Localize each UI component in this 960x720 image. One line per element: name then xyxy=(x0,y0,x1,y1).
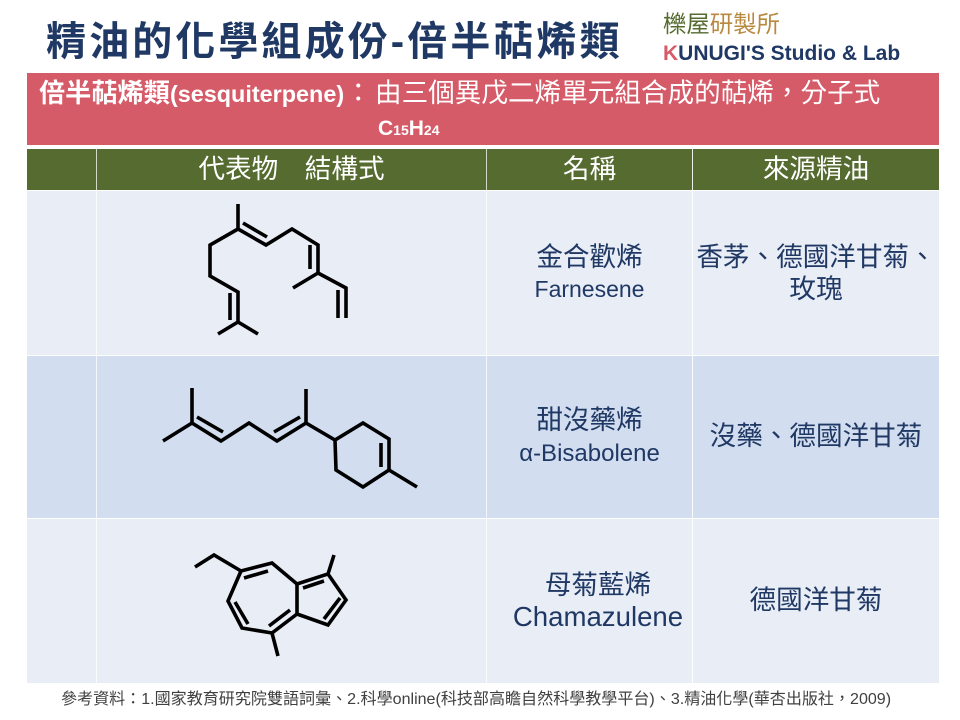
panel: definition banner xyxy=(27,73,939,145)
title: 精油的化學組成份-倍半萜烯類 xyxy=(46,20,623,64)
English name: Chamazulene xyxy=(513,601,683,632)
table header row xyxy=(27,149,939,190)
source: Chamazulene: 德國洋甘菊 xyxy=(750,585,882,615)
name: Chamazulene xyxy=(513,570,683,632)
row 2 background xyxy=(27,356,939,518)
name: Farnesene xyxy=(535,242,644,302)
header: source oil: 來源精油 xyxy=(763,154,869,184)
definition text: 由三個異戊二烯單元組合成的萜烯，分子式 xyxy=(375,78,880,108)
header: structure: 代表物 結構式 xyxy=(198,154,385,184)
references footnote: 參考資料：1.國家教育研究院雙語詞彙、2.科學online(科技部高瞻自然科學教學平台)、3.精油化學(華杏出版社，2009) xyxy=(61,690,891,708)
Chinese name: 母菊藍烯 xyxy=(545,570,651,600)
name: alpha-Bisabolene xyxy=(519,405,660,467)
source line 2: 玫瑰 xyxy=(789,274,843,304)
header: name: 名稱 xyxy=(563,154,616,184)
English name: Farnesene xyxy=(535,276,644,302)
panel: table xyxy=(27,149,939,683)
source: alpha-Bisabolene: 沒藥、德國洋甘菊 xyxy=(710,421,922,451)
source line 1: 香茅、德國洋甘菊、 xyxy=(696,242,936,272)
Chinese name: 金合歡烯 xyxy=(536,242,643,272)
column divider 3 xyxy=(692,149,693,683)
logo english name: KUNUGI'S Studio & Lab xyxy=(663,42,900,65)
definition colon: ： xyxy=(345,78,372,108)
Chinese name: 甜沒藥烯 xyxy=(536,405,643,435)
column divider 1 xyxy=(96,149,97,683)
molecule: Farnesene xyxy=(210,204,346,334)
molecule: alpha-Bisabolene xyxy=(163,388,417,487)
logo chinese name: 櫟屋研製所 xyxy=(663,11,780,37)
column divider 2 xyxy=(486,149,487,683)
molecule: Chamazulene xyxy=(195,555,346,656)
source: Farnesene xyxy=(696,242,936,304)
logo xyxy=(663,11,900,65)
English name: α-Bisabolene xyxy=(519,440,660,467)
molecular formula: C15H24 xyxy=(378,117,440,140)
row 3 background xyxy=(27,519,939,683)
row 1 background xyxy=(27,191,939,355)
definition lead term: 倍半萜烯類(sesquiterpene) xyxy=(39,78,344,108)
